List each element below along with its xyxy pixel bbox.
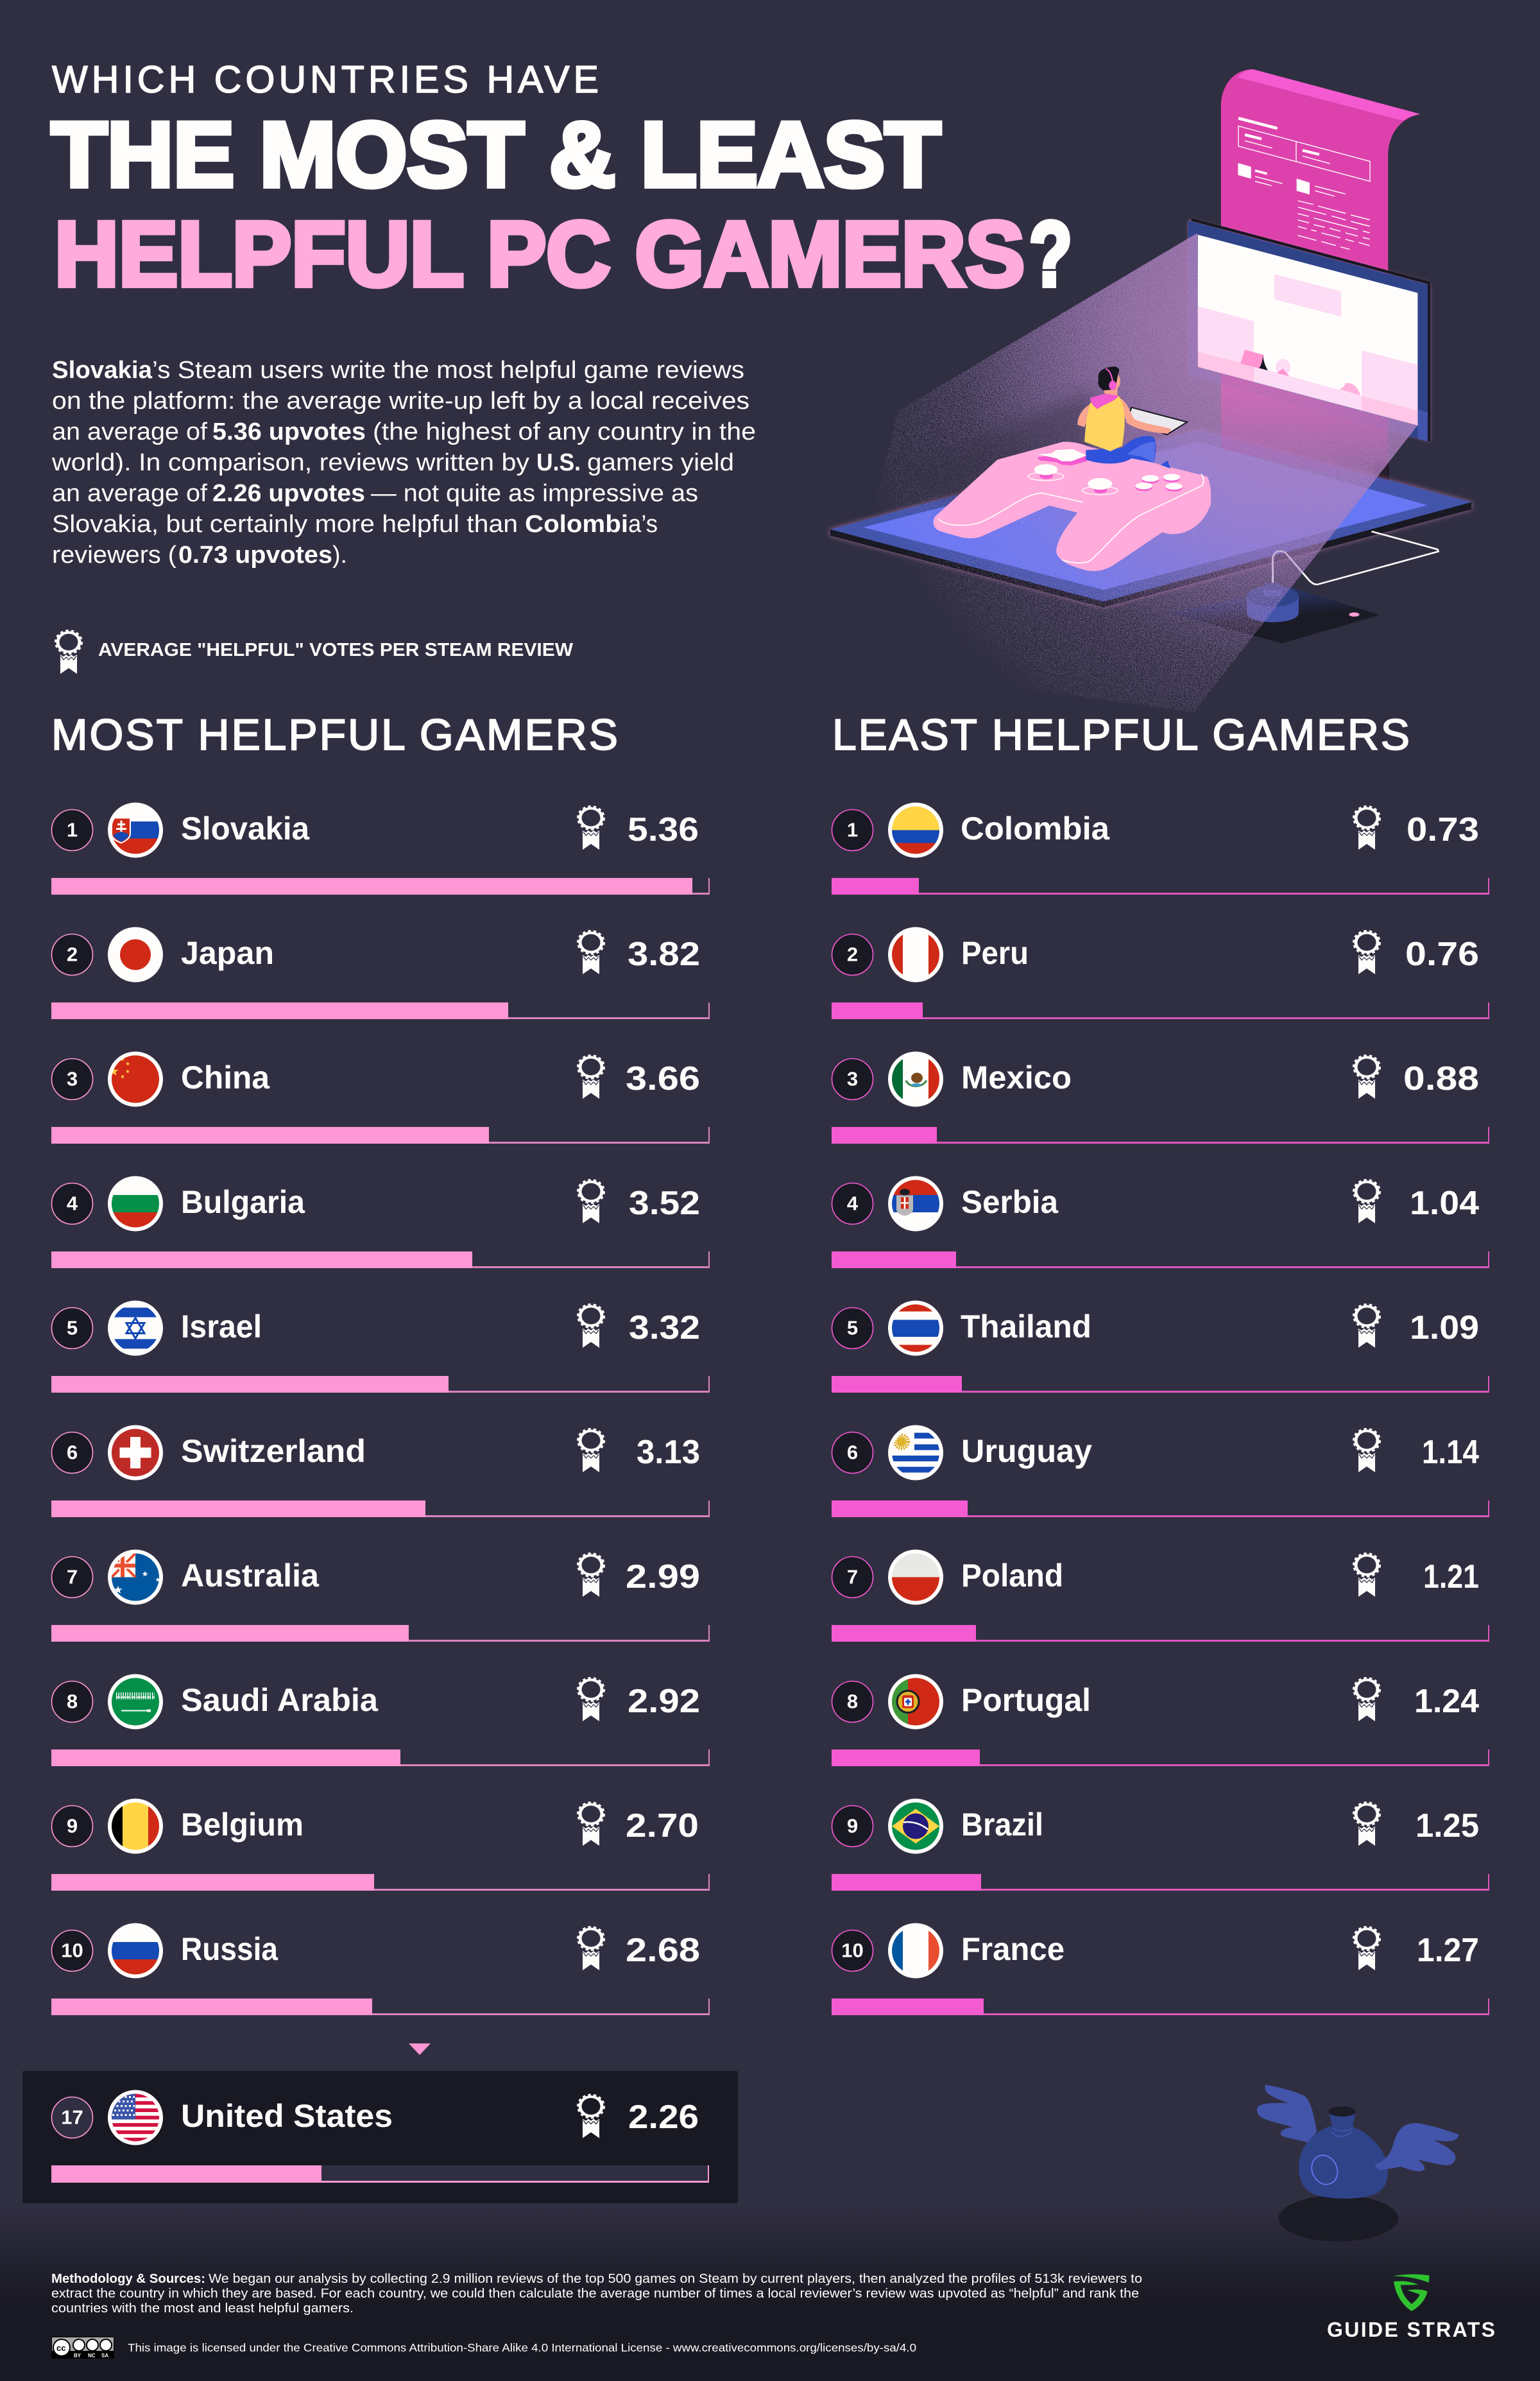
monitor <box>1188 219 1430 442</box>
logo wordmark: GUIDE STRATS <box>1327 2318 1495 2341</box>
bar <box>832 1998 1489 2015</box>
icon: green shield <box>1394 2274 1430 2311</box>
intro paragraph: gamers yield <box>587 449 734 476</box>
rank: 4 <box>67 1192 78 1214</box>
row: Slovakia <box>51 802 710 895</box>
value: 1.25 <box>1416 1807 1479 1844</box>
methodology text: We began our analysis by collecting 2.9 million reviews of the top 500 games on Steam by current players, then analyzed the profiles of 513k reviewers to <box>209 2271 1142 2286</box>
license badge: BY <box>74 2353 81 2359</box>
ribbon <box>578 931 604 974</box>
ribbon <box>578 1055 604 1099</box>
row: China <box>51 1051 710 1144</box>
bar <box>51 1376 710 1393</box>
rank: 10 <box>841 1939 864 1961</box>
icon: ribbon award <box>55 630 82 674</box>
ribbon <box>1354 1802 1380 1846</box>
ribbon <box>1354 1927 1380 1970</box>
value: 2.26 <box>628 2099 699 2136</box>
name: Bulgaria <box>181 1184 305 1220</box>
rank <box>51 1432 92 1474</box>
value: 2.70 <box>626 1807 699 1844</box>
methodology text: Methodology & Sources: <box>51 2271 205 2286</box>
bar <box>51 1127 710 1144</box>
rank <box>51 1806 92 1847</box>
ribbon <box>578 1553 604 1597</box>
flag: Japan <box>108 927 163 982</box>
name: Slovakia <box>181 811 310 847</box>
bar <box>51 1625 710 1642</box>
flag: Thailand <box>888 1300 943 1355</box>
rank <box>832 1308 873 1349</box>
row: Peru <box>832 927 1489 1019</box>
bar <box>51 1500 710 1517</box>
value: 1.04 <box>1410 1185 1479 1222</box>
cable and mouse cylinder <box>1247 531 1439 623</box>
flag: Israel <box>108 1300 163 1355</box>
monitor screen <box>1198 235 1417 425</box>
bar <box>832 1625 1489 1642</box>
flag: Mexico <box>888 1051 943 1106</box>
ribbon <box>578 1180 604 1223</box>
name: Belgium <box>181 1807 304 1843</box>
rank: 6 <box>847 1441 858 1463</box>
value: 2.92 <box>628 1683 700 1720</box>
flag: Belgium <box>108 1798 163 1853</box>
rank <box>51 1557 92 1598</box>
bar <box>51 1251 710 1268</box>
rank: 7 <box>847 1566 858 1588</box>
flag: Colombia <box>888 802 943 857</box>
intro paragraph: 2.26 upvotes <box>212 480 365 507</box>
footer background gradient <box>0 2205 1540 2381</box>
flag: Australia <box>108 1549 163 1604</box>
ribbon <box>578 1429 604 1472</box>
bar <box>51 2165 709 2183</box>
license badge <box>51 2337 114 2359</box>
flag: Bulgaria <box>108 1176 163 1231</box>
intro paragraph: reviewers ( <box>52 542 176 569</box>
value: 1.09 <box>1410 1309 1479 1346</box>
heading: most helpful: MOST HELPFUL GAMERS <box>51 710 618 759</box>
flag: Slovakia <box>108 802 163 857</box>
intro paragraph: ). <box>332 542 347 569</box>
rank: 5 <box>67 1317 78 1339</box>
name: Mexico <box>961 1060 1072 1096</box>
value: 3.66 <box>626 1060 700 1097</box>
heading: least helpful: LEAST HELPFUL GAMERS <box>832 710 1410 759</box>
ribbon <box>578 806 604 850</box>
rank <box>51 1308 92 1349</box>
row: Belgium <box>51 1798 710 1891</box>
bar <box>832 1376 1489 1393</box>
flag: China <box>108 1051 163 1106</box>
ribbon <box>1354 806 1380 850</box>
pink paper reflection under the monitor <box>1221 369 1388 462</box>
ribbon <box>578 2095 604 2138</box>
intro paragraph <box>51 357 756 569</box>
name: Russia <box>181 1931 278 1967</box>
rank: 1 <box>67 819 78 841</box>
panel: United States highlight <box>22 2071 738 2203</box>
bar <box>51 878 710 895</box>
name: France <box>961 1931 1065 1967</box>
value: 0.88 <box>1403 1060 1479 1097</box>
row: Portugal <box>832 1674 1489 1766</box>
rank <box>832 1681 873 1723</box>
name: Brazil <box>961 1807 1043 1843</box>
name: Thailand <box>961 1309 1091 1345</box>
name: Israel <box>181 1309 262 1345</box>
gamer figure with keyboard <box>1077 366 1187 467</box>
title line 1: WHICH COUNTRIES HAVE <box>52 58 599 101</box>
ribbon <box>1354 1429 1380 1472</box>
row: Poland <box>832 1549 1489 1642</box>
bar <box>832 1874 1489 1891</box>
rank: 4 <box>847 1192 859 1214</box>
intro paragraph: on the platform: the average write-up left by a local receives <box>52 388 749 415</box>
floor platform <box>830 429 1471 607</box>
ribbon <box>578 1927 604 1970</box>
value: 1.24 <box>1414 1683 1479 1720</box>
name: Colombia <box>961 811 1110 847</box>
rank <box>832 1806 873 1847</box>
rank <box>51 2097 92 2138</box>
title question mark: ? <box>1029 203 1072 305</box>
name: Switzerland <box>181 1433 366 1469</box>
value: 3.52 <box>629 1185 700 1222</box>
arrow: down to United States <box>409 2043 431 2055</box>
row: Australia <box>51 1549 710 1642</box>
paper sheet behind the monitor <box>1221 69 1420 285</box>
right wing <box>1374 2123 1459 2171</box>
flag: Peru <box>888 927 943 982</box>
bar <box>832 1002 1489 1019</box>
name: United States <box>181 2098 393 2134</box>
flag: Uruguay <box>888 1425 943 1480</box>
legend label: AVERAGE "HELPFUL" VOTES PER STEAM REVIEW <box>98 640 574 660</box>
title <box>51 58 1072 305</box>
intro paragraph: Colombi <box>525 511 628 538</box>
flag: France <box>888 1923 943 1978</box>
bag shadow <box>1278 2196 1398 2242</box>
ribbon <box>1354 1678 1380 1721</box>
desk pad and mouse base <box>1169 463 1389 643</box>
row: Colombia <box>832 802 1489 895</box>
methodology text: extract the country in which they are based. For each country, we could then calculate the average number of times a local reviewer’s review was upvoted as “helpful” and rank the <box>51 2286 1139 2301</box>
methodology text <box>51 2271 1142 2316</box>
intro paragraph: Slovakia, but certainly more helpful than <box>52 511 518 538</box>
intro paragraph: an average of <box>52 480 207 507</box>
value: 0.73 <box>1407 811 1479 848</box>
paper sheet content lines <box>1238 118 1370 250</box>
bar <box>51 1002 710 1019</box>
row: Switzerland <box>51 1425 710 1517</box>
license text: This image is licensed under the Creative Commons Attribution-Share Alike 4.0 International License - www.creativecommons.org/licenses/by-sa/4.0 <box>128 2341 916 2354</box>
bar <box>832 1500 1489 1517</box>
title line 3: HELPFUL PC GAMERS <box>55 203 1025 305</box>
intro paragraph: a’s <box>628 511 658 538</box>
ribbon <box>1354 1180 1380 1223</box>
rank: 9 <box>847 1815 858 1837</box>
panel: least helpful gamers <box>832 802 1489 2015</box>
ribbon <box>578 1304 604 1348</box>
flag: Russia <box>108 1923 163 1978</box>
rank: 1 <box>847 819 858 841</box>
rank <box>51 1930 92 1972</box>
row: France <box>832 1923 1489 2015</box>
intro paragraph: U.S. <box>536 449 581 476</box>
flag: Saudi Arabia <box>108 1674 163 1729</box>
methodology text: countries with the most and least helpful gamers. <box>51 2301 354 2316</box>
intro paragraph: world). In comparison, reviews written by <box>51 449 529 476</box>
intro paragraph: an average of <box>52 418 207 445</box>
left wing <box>1257 2084 1317 2142</box>
rank <box>51 1183 92 1225</box>
rank <box>832 1557 873 1598</box>
rank: 3 <box>847 1068 858 1090</box>
ribbon <box>1354 1304 1380 1348</box>
rank: 8 <box>847 1690 858 1712</box>
rank <box>832 1930 873 1972</box>
row: Brazil <box>832 1798 1489 1891</box>
license badge: NC <box>88 2353 96 2359</box>
intro paragraph: — not quite as impressive as <box>371 480 698 507</box>
value: 2.99 <box>626 1558 700 1595</box>
value: 3.32 <box>629 1309 700 1346</box>
flag: United States <box>108 2090 163 2145</box>
flag: Switzerland <box>108 1425 163 1480</box>
rank <box>51 810 92 851</box>
name: China <box>181 1060 270 1096</box>
rank <box>832 810 873 851</box>
illustration: flying bag with wings <box>1257 2084 1459 2242</box>
rank <box>51 1059 92 1100</box>
value: 5.36 <box>628 811 699 848</box>
flag: Portugal <box>888 1674 943 1729</box>
row: Uruguay <box>832 1425 1489 1517</box>
rank: 5 <box>847 1317 858 1339</box>
bar <box>51 1749 710 1766</box>
name: Portugal <box>961 1682 1091 1718</box>
value: 2.68 <box>626 1932 700 1969</box>
flag: Serbia <box>888 1176 943 1231</box>
rank: 2 <box>67 943 78 965</box>
bar <box>51 1874 710 1891</box>
ribbon <box>1354 1055 1380 1099</box>
rank <box>832 934 873 976</box>
logo: Guide Strats <box>1327 2274 1495 2341</box>
value: 1.27 <box>1417 1932 1479 1969</box>
name: Saudi Arabia <box>181 1682 379 1718</box>
intro paragraph: 5.36 upvotes <box>212 418 366 445</box>
value: 0.76 <box>1405 936 1479 973</box>
intro paragraph: (the highest of any country in the <box>373 418 756 445</box>
value: 1.14 <box>1422 1434 1479 1471</box>
ribbon <box>1354 1553 1380 1597</box>
value: 3.13 <box>637 1434 700 1471</box>
legend <box>55 630 574 674</box>
row: Serbia <box>832 1176 1489 1268</box>
row: Israel <box>51 1300 710 1393</box>
ribbon <box>578 1678 604 1721</box>
rank: 10 <box>61 1939 83 1961</box>
intro paragraph: Slovakia <box>52 357 153 384</box>
ribbon <box>1354 931 1380 974</box>
name: Peru <box>961 935 1029 971</box>
rank <box>51 934 92 976</box>
rank: 8 <box>67 1690 78 1712</box>
row: Bulgaria <box>51 1176 710 1268</box>
intro paragraph: 0.73 upvotes <box>178 542 332 569</box>
name: Poland <box>961 1558 1063 1594</box>
flag: Brazil <box>888 1798 943 1853</box>
flag: Poland <box>888 1549 943 1604</box>
panel: most helpful gamers <box>51 802 710 2015</box>
name: Serbia <box>961 1184 1059 1220</box>
bag body <box>1299 2106 1388 2199</box>
title line 2: THE MOST & LEAST <box>51 104 941 206</box>
rank: 7 <box>67 1566 78 1588</box>
license badge: cc <box>56 2343 65 2353</box>
row: Japan <box>51 927 710 1019</box>
value: 3.82 <box>628 936 700 973</box>
rank <box>51 1681 92 1723</box>
rank <box>832 1432 873 1474</box>
intro paragraph: ’s Steam users write the most helpful game reviews <box>152 357 744 384</box>
name: Japan <box>181 935 274 971</box>
ribbon <box>578 1802 604 1846</box>
hero illustration: gamer on a controller facing a monitor <box>830 69 1471 712</box>
rank: 3 <box>67 1068 78 1090</box>
bar <box>832 878 1489 895</box>
value: 1.21 <box>1423 1558 1479 1595</box>
rank: 2 <box>847 943 858 965</box>
bar <box>832 1749 1489 1766</box>
bar <box>832 1127 1489 1144</box>
bar <box>51 1998 710 2015</box>
name: Uruguay <box>961 1433 1092 1469</box>
bar <box>832 1251 1489 1268</box>
row: Mexico <box>832 1051 1489 1144</box>
rank <box>832 1183 873 1225</box>
rank: 9 <box>67 1815 78 1837</box>
row: Russia <box>51 1923 710 2015</box>
row: Thailand <box>832 1300 1489 1393</box>
row: Saudi Arabia <box>51 1674 710 1766</box>
rank: 6 <box>67 1441 78 1463</box>
name: Australia <box>181 1558 320 1594</box>
game controller <box>934 442 1211 571</box>
rank: 17 <box>61 2106 83 2128</box>
light beam from the screen <box>860 233 1417 712</box>
license badge: SA <box>101 2353 108 2359</box>
rank <box>832 1059 873 1100</box>
